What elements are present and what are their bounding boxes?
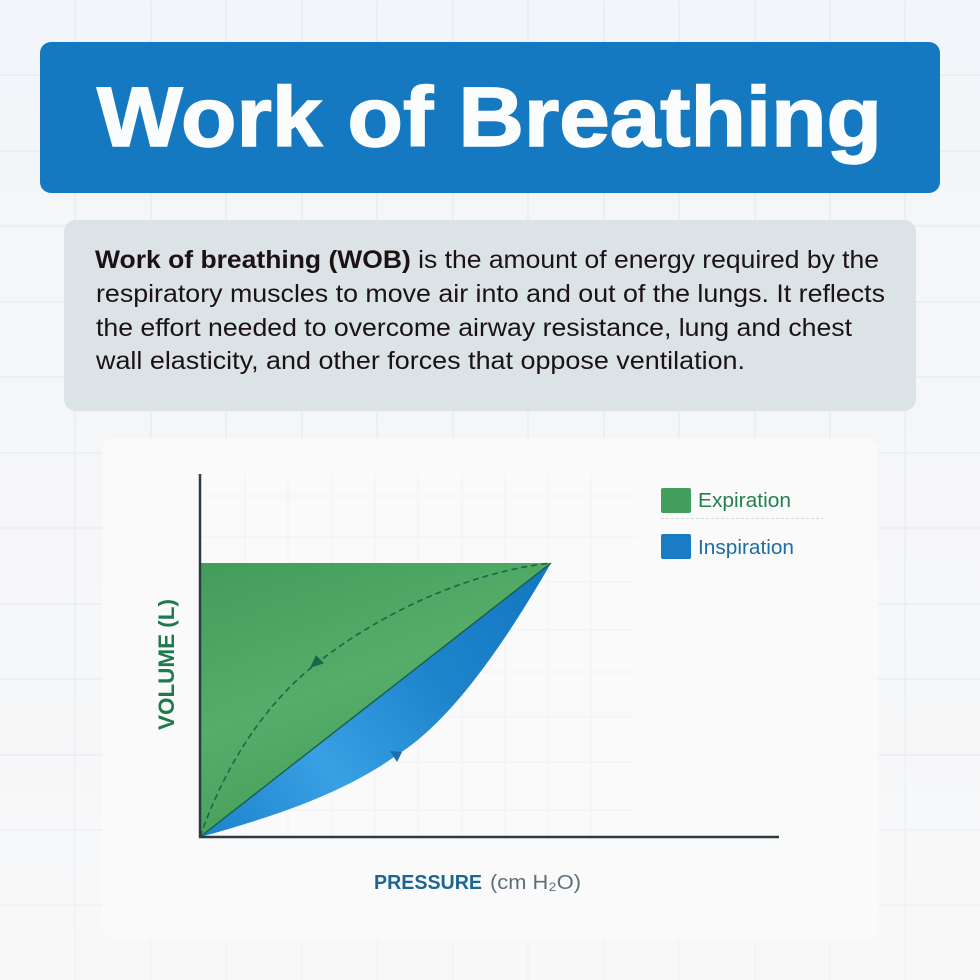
definition text: Work of breathing (WOB) is the amount of energy required by the: [95, 246, 879, 274]
expiration arrow: [311, 656, 323, 667]
definition text: the effort needed to overcome airway resistance, lung and chest: [96, 314, 852, 342]
definition text: wall elasticity, and other forces that oppose ventilation.: [95, 347, 745, 375]
x axis label: PRESSURE: [374, 872, 482, 894]
title banner: [40, 42, 940, 193]
dashed expiration curve: [200, 563, 551, 837]
inspiration area: [200, 563, 551, 837]
x axis label: (cm H₂O): [490, 872, 581, 894]
x axis label: [374, 872, 581, 894]
horizontal axis: [199, 836, 779, 838]
legend: expiration: [661, 488, 791, 513]
diagonal line: [200, 563, 551, 837]
legend: inspiration: Inspiration: [698, 537, 794, 559]
legend: [661, 488, 823, 559]
legend: expiration: Expiration: [698, 490, 791, 512]
chart grid: [200, 474, 636, 837]
inspiration arrow: [390, 751, 402, 762]
definition text: respiratory muscles to move air into and out of the lungs. It reflects: [96, 280, 885, 308]
y axis label: VOLUME (L): [154, 599, 179, 730]
expiration area: [200, 563, 551, 837]
legend: inspiration: [661, 534, 794, 559]
definition panel: [64, 220, 916, 411]
title: Work of Breathing: [97, 70, 882, 164]
chart panel: [102, 438, 878, 940]
definition text: [95, 246, 885, 375]
vertical axis: [199, 474, 201, 838]
